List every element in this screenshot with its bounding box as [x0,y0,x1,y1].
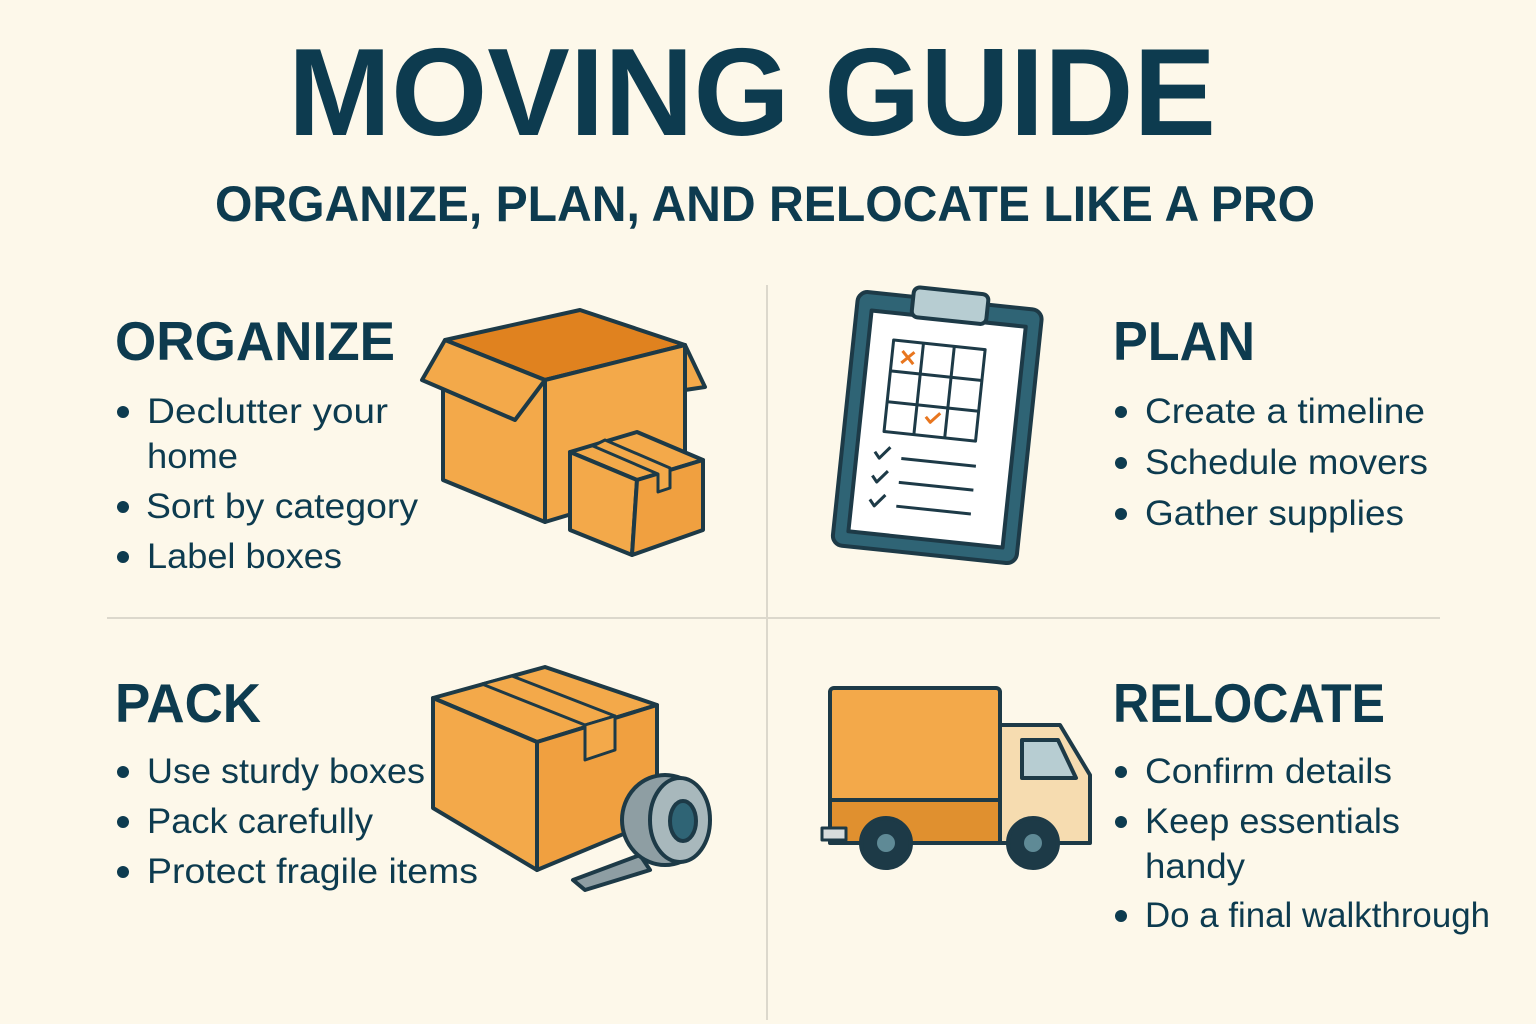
icon: clipboard [832,281,1044,564]
bullet list: organize: Label boxes [147,537,342,576]
heading: pack: PACK [115,672,261,734]
bullet list: pack: Pack carefully [147,802,374,841]
bullet list: plan: Create a timeline [1145,392,1425,431]
bullet list: plan: Gather supplies [1145,494,1404,533]
bullet list: relocate [1115,752,1490,935]
heading: relocate: RELOCATE [1113,672,1385,734]
bullet list: pack: Use sturdy boxes [147,752,425,791]
panel: plan [832,281,1428,564]
bullet list: organize: Declutter your [147,392,388,431]
bullet list: organize [117,392,419,576]
bullet list: relocate: Do a final walkthrough [1145,896,1490,935]
panel: relocate [822,672,1490,935]
bullet list: relocate: Confirm details [1145,752,1392,791]
bullet list: relocate: Keep essentials [1145,802,1400,841]
bullet list: organize: Sort by category [146,487,419,526]
icon: open box [422,310,705,555]
heading: plan: PLAN [1113,310,1255,372]
icon: truck [822,688,1090,868]
bullet list: organize: home [147,437,238,476]
bullet list: plan: Schedule movers [1145,443,1428,482]
heading: organize: ORGANIZE [115,310,395,372]
bullet list: pack [117,752,478,891]
subtitle: ORGANIZE, PLAN, AND RELOCATE LIKE A PRO [215,176,1315,232]
panel: organize [115,310,705,576]
bullet list: pack: Protect fragile items [147,852,478,891]
bullet list: plan [1115,392,1428,533]
icon: box and tape [433,667,710,890]
panel: pack [115,667,710,891]
title: MOVING GUIDE [288,24,1216,162]
bullet list: relocate: handy [1145,847,1246,886]
